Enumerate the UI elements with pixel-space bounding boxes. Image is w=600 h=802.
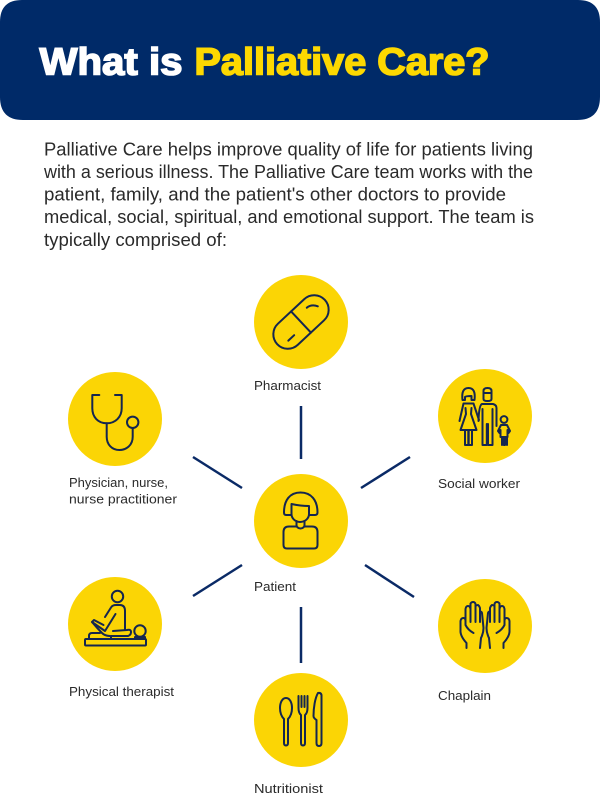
- node: physician, nurse, nurse practitioner: nurse practitioner: [69, 492, 178, 506]
- header banner: [0, 0, 600, 120]
- icon: patient bust: [284, 492, 318, 548]
- icon: family: [460, 388, 510, 445]
- node: social worker: Social worker: [438, 476, 521, 491]
- icon: spoon, fork and knife: [280, 693, 322, 746]
- node: nutritionist: [254, 673, 348, 796]
- node: patient: Patient: [254, 579, 296, 594]
- intro paragraph: patient, family, and the patient's other doctors to provide: [44, 184, 506, 204]
- node: chaplain: Chaplain: [438, 688, 491, 703]
- node: pharmacist: Pharmacist: [254, 378, 321, 393]
- node: physical therapist: [68, 577, 174, 699]
- node: physician, nurse, nurse practitioner: Physician, nurse,: [69, 475, 168, 490]
- icon: stethoscope: [92, 395, 138, 450]
- intro paragraph: with a serious illness. The Palliative Care team works with the: [43, 162, 533, 182]
- intro paragraph: Palliative Care helps improve quality of life for patients living: [44, 140, 533, 160]
- intro paragraph: medical, social, spiritual, and emotional support. The team is: [44, 207, 534, 227]
- node: chaplain: [438, 579, 532, 703]
- intro paragraph: typically comprised of:: [44, 230, 227, 250]
- node: nutritionist: Nutritionist: [254, 781, 323, 796]
- icon: open hands: [460, 602, 510, 648]
- title: What is: [40, 42, 182, 84]
- node: patient: [254, 474, 348, 594]
- intro paragraph: [43, 140, 534, 250]
- node: physical therapist: Physical therapist: [69, 684, 174, 699]
- title: [40, 42, 490, 84]
- node: pharmacist: [254, 275, 348, 393]
- connector lines: [193, 406, 414, 663]
- icon: pill capsule: [267, 289, 335, 355]
- icon: therapist and patient: [85, 591, 146, 646]
- node: physician, nurse, nurse practitioner: [68, 372, 178, 506]
- node: social worker: [438, 369, 532, 491]
- title: Palliative Care?: [194, 42, 490, 84]
